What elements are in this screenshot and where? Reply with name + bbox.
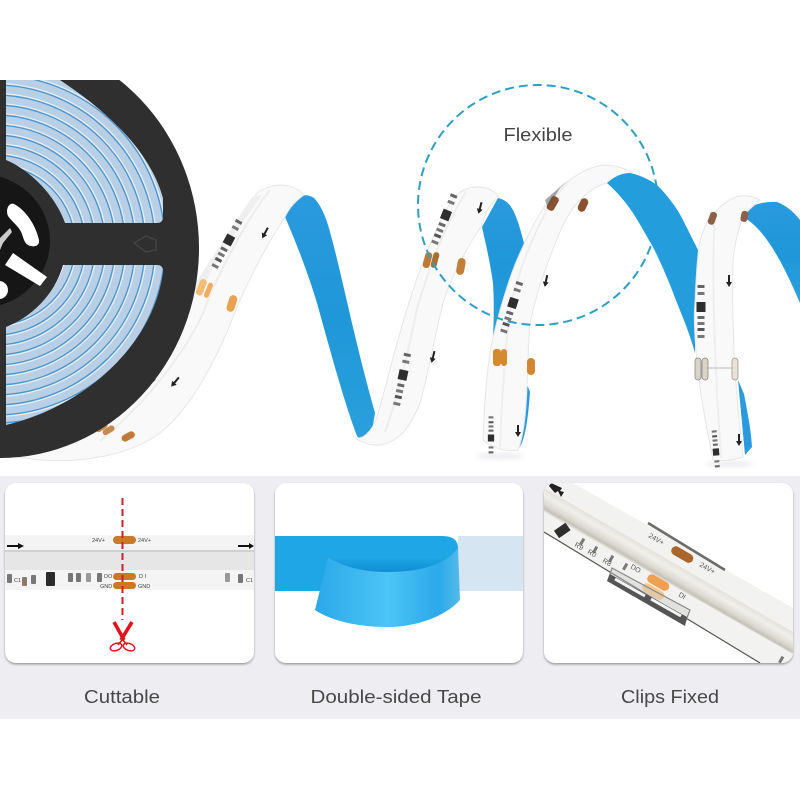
printed labels: DI [677,592,687,601]
pad labels: GND [100,584,112,590]
tape band [275,536,458,591]
panel: double-sided tape [275,483,524,663]
copper pads [113,536,136,589]
angled strip body [544,470,793,663]
reel [0,38,199,458]
pad labels: D I [139,574,146,580]
pad labels [14,538,253,590]
blue tape tail behind arch [519,380,530,448]
reel lower window with coiled strip [6,265,163,425]
lower clip [607,568,690,626]
printed labels: 24V+ [698,562,716,576]
pad labels: 24V+ [92,538,105,544]
heading: flexible: Flexible [504,124,572,145]
reel hub [0,174,50,308]
panel: clips fixed [544,470,793,663]
strip top view [5,535,254,590]
white strip: right segment [694,196,760,468]
label: double-sided tape: Double-sided Tape [310,686,482,707]
gel tube [544,488,793,654]
reel upper window with coiled strip [6,80,163,223]
blue tape: first fold [285,195,375,439]
white strip: tall arch [483,165,632,453]
pad labels: GND [138,584,150,590]
blue tape: right end band [743,202,800,303]
label: clips fixed: Clips Fixed [621,686,719,707]
tape curl front [315,548,460,627]
components [7,573,243,586]
copper pads [641,545,695,601]
cut line [122,498,124,620]
pad labels: DO [104,574,113,580]
upper clip [648,523,725,570]
white strip: segment leaving reel [0,185,304,461]
tape curl inner [340,562,439,572]
pad labels: C1 [14,578,21,584]
printed labels [573,533,716,601]
pad labels: 24V+ [138,538,151,544]
blue tape: big arch band [607,173,698,353]
reel arrow mark [134,236,156,252]
white strip: second rise [355,187,499,445]
chip and resistors [549,483,784,663]
printed labels: DO [629,564,642,575]
wire clips on right segment [695,358,738,380]
label: cuttable: Cuttable [84,686,160,707]
direction arrows [7,543,254,549]
printed labels: R0 [586,549,597,559]
dashed circle callout [418,85,658,325]
pad labels: C1 [246,578,253,584]
reflection under the strip [476,453,754,467]
printed labels: R9 [573,542,584,552]
blue tape tail at right [738,380,752,455]
feature band background [0,476,800,719]
printed labels: R8 [601,558,612,568]
strip photo: flexible LED strip wave [0,85,800,468]
panel: cuttable [5,483,254,663]
printed labels: 24V+ [647,533,665,547]
blue tape: second fold [482,198,524,337]
scissors icon [109,622,136,652]
